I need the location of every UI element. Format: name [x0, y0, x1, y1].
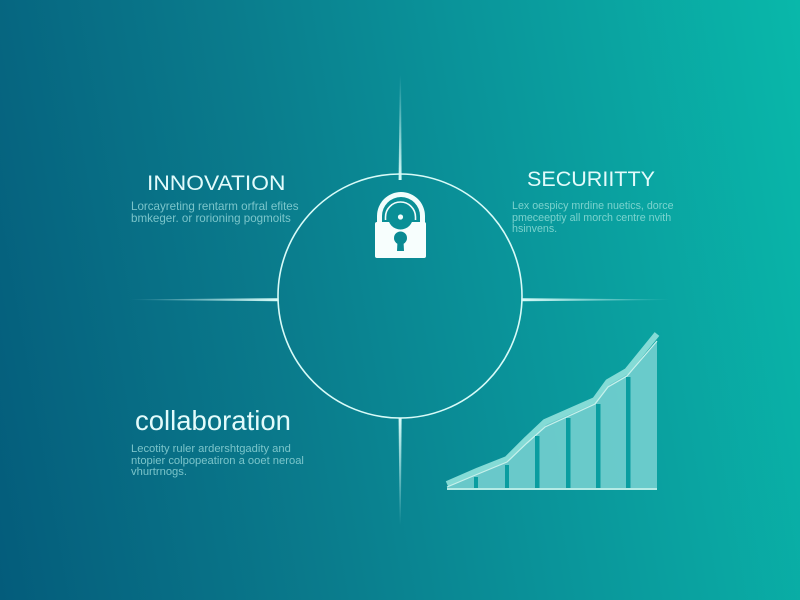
text block: innovation description: Lorcayreting rentarm orfral efites — [131, 200, 299, 213]
text block: collaboration description — [131, 443, 304, 478]
text block: security description: Lex oespicy mrdine nuetics, dorce — [512, 200, 674, 212]
text block: security description: hsinvens. — [512, 223, 557, 235]
text block: security description — [512, 200, 674, 235]
text block: innovation description — [131, 200, 299, 224]
heading: security: SECURIITTY — [527, 168, 655, 191]
heading: innovation: INNOVATION — [147, 172, 285, 195]
text block: collaboration description: ntopier colpopeatiron a ooet neroal — [131, 454, 304, 466]
text block: collaboration description: vhurtrnogs. — [131, 466, 187, 478]
text block: collaboration description: Lecotity ruler ardershtgadity and — [131, 443, 291, 455]
heading: collaboration: collaboration — [135, 405, 291, 436]
text block: innovation description: bmkeger. or rorioning pogmoits — [131, 212, 291, 224]
text block: security description: pmeceeptiy all morch centre nvith — [512, 212, 671, 224]
